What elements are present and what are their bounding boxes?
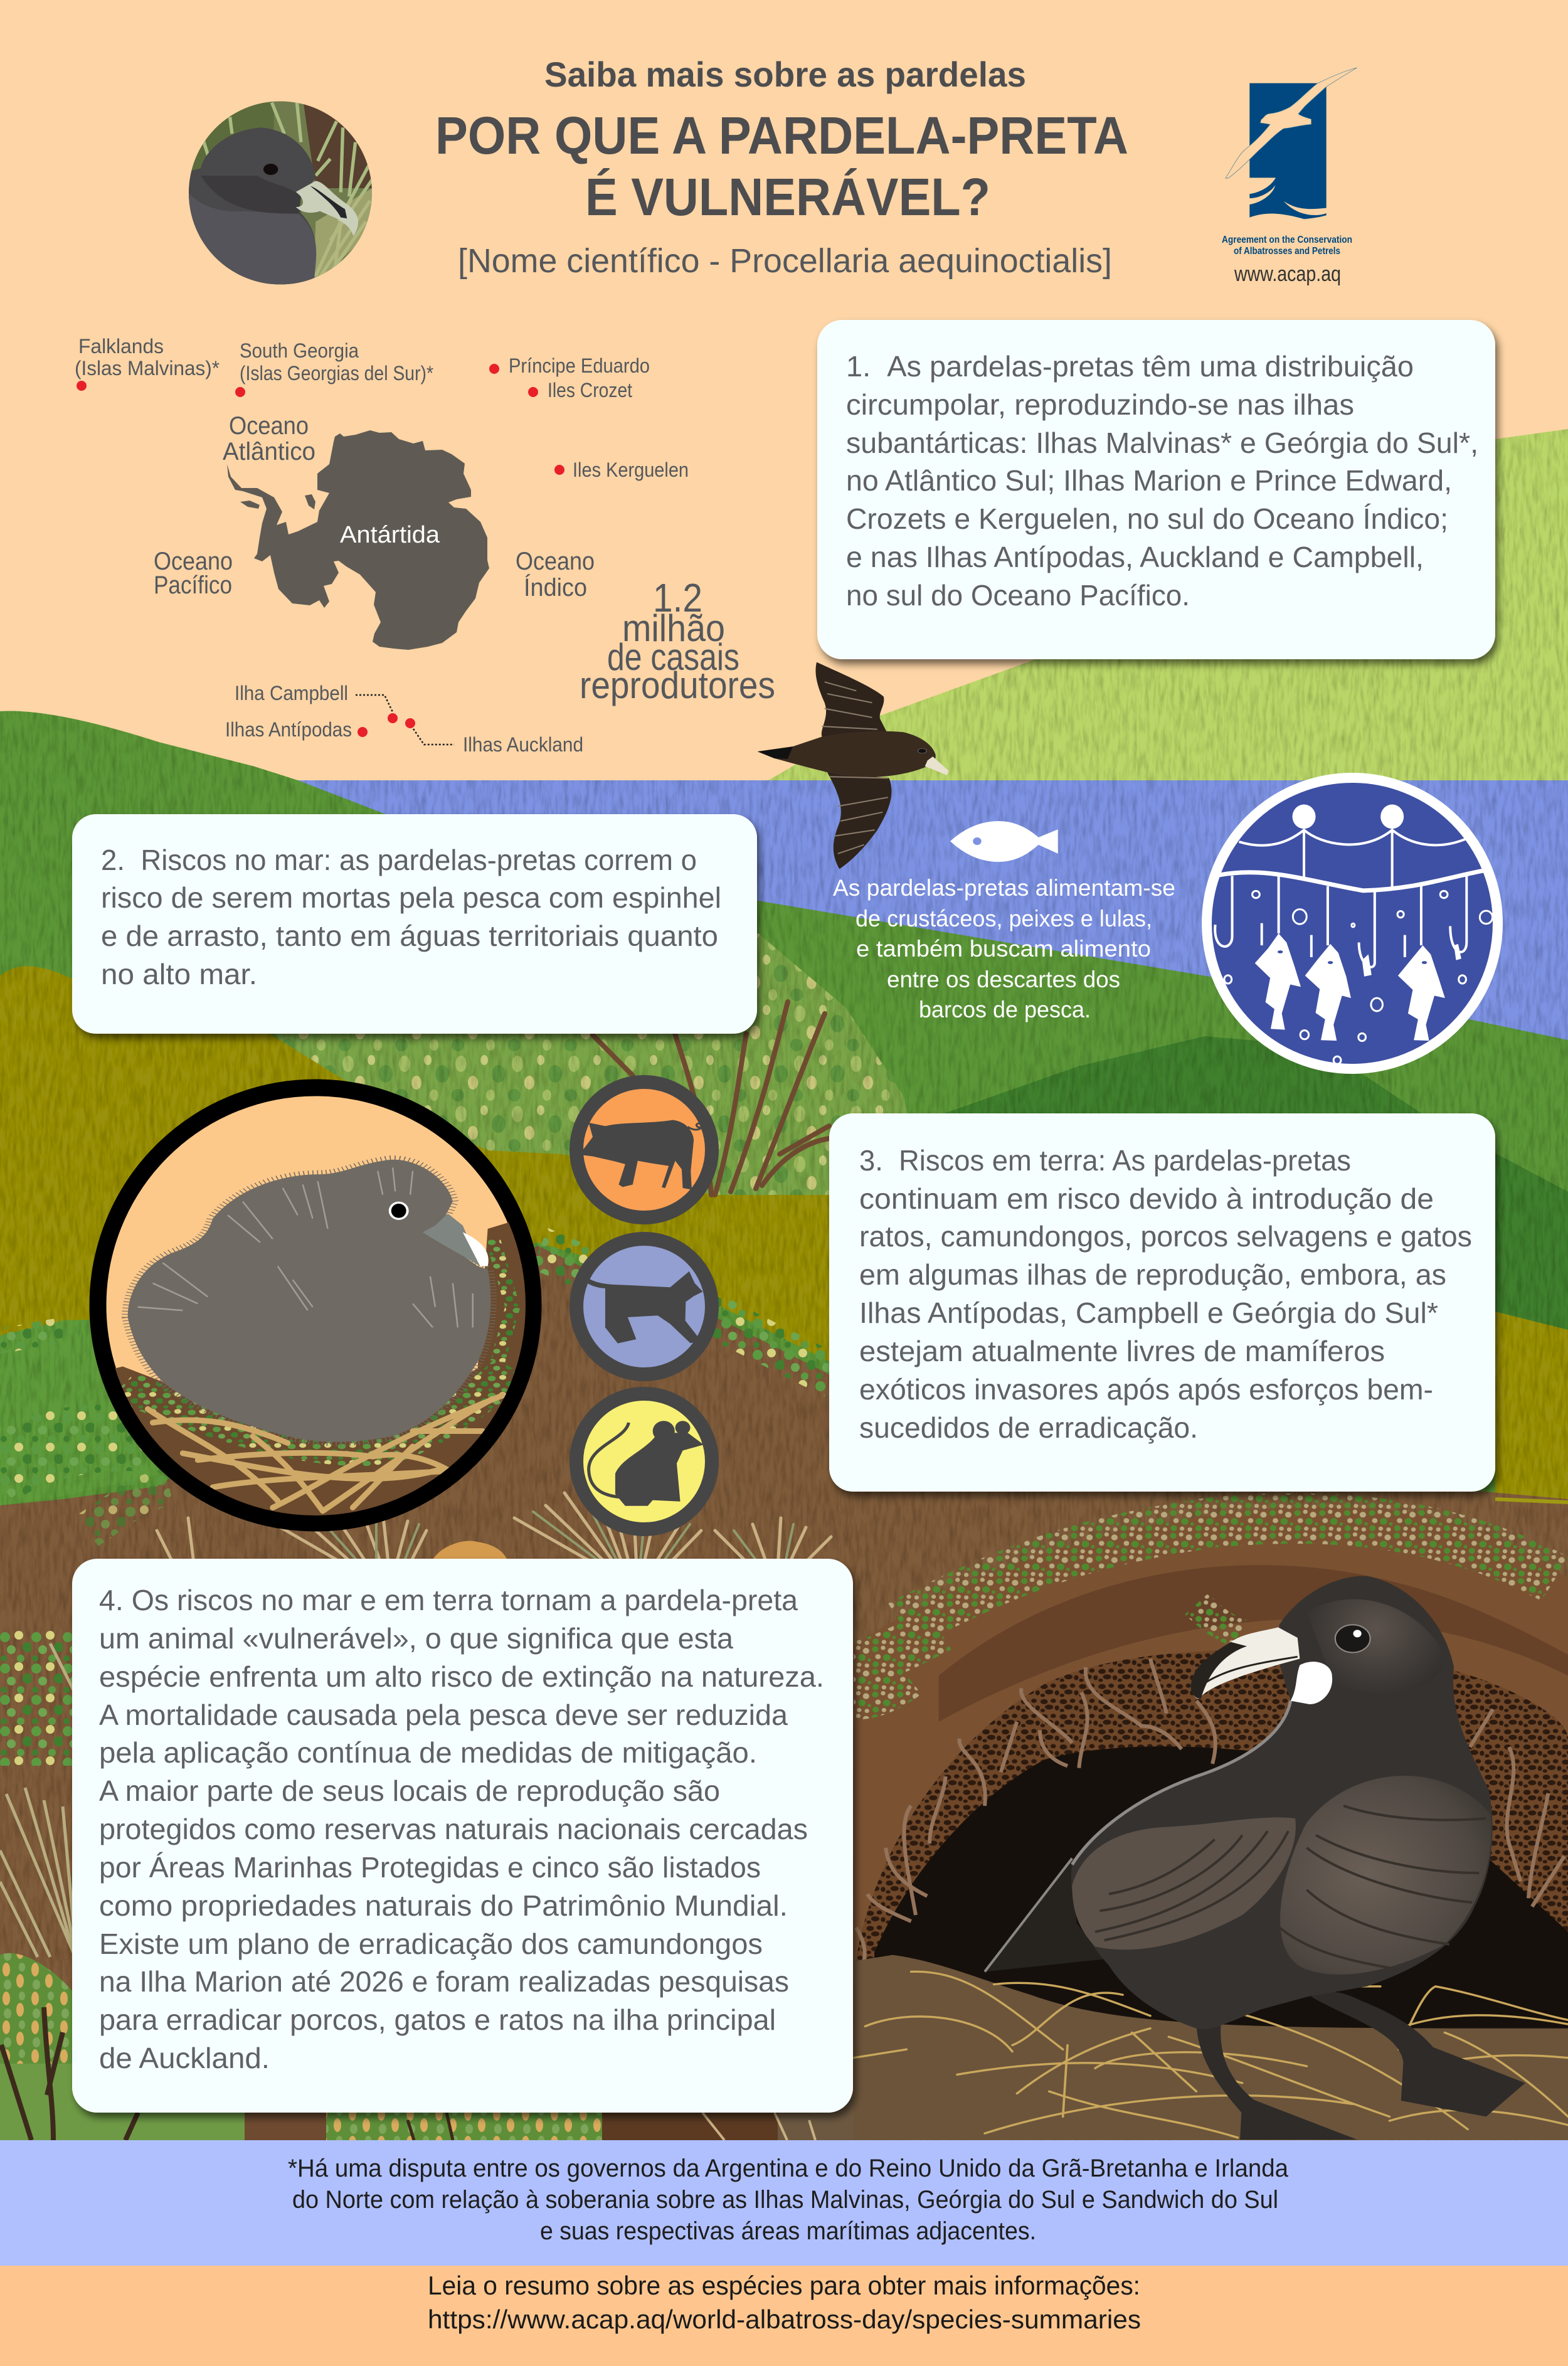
island labels: Iles Kerguelen (573, 459, 689, 481)
scientific name: [Nome científico - Procellaria aequinoctialis] (458, 242, 1112, 280)
header kicker: Saiba mais sobre as pardelas (544, 55, 1026, 94)
diet caption (833, 875, 1175, 1022)
ocean labels (154, 412, 595, 602)
chick eye (389, 1202, 409, 1220)
main title: POR QUE A PARDELA-PRETA (435, 106, 1128, 165)
panel 2 text: 2. Riscos no mar: as pardelas-pretas correm o (101, 844, 697, 876)
panel 2 text: no alto mar. (101, 958, 257, 990)
ropes and hooks (1215, 830, 1487, 967)
panel 4 text: um animal «vulnerável», o que significa que esta (99, 1622, 733, 1655)
island labels: South Georgia (240, 339, 359, 362)
panel 3 text: exóticos invasores após após esforços bem- (859, 1373, 1433, 1406)
diet caption: de crustáceos, peixes e lulas, (856, 906, 1152, 931)
portrait photo (188, 100, 373, 285)
population figure: 1.2 (653, 575, 702, 620)
burrow scene with bird (854, 1507, 1568, 2140)
further reading band (0, 2266, 1568, 2366)
continent shape (227, 430, 489, 650)
panel 1: distribution (817, 320, 1495, 659)
ocean labels: Índico (524, 573, 587, 602)
panel 4 text: pela aplicação contínua de medidas de mitigação. (99, 1736, 757, 1769)
island labels: (Islas Georgias del Sur)* (240, 362, 433, 385)
ground (854, 1955, 1568, 2140)
population figure: de casais (607, 636, 739, 678)
dotted leader lines (356, 695, 454, 745)
panel 1 text: Crozets e Kerguelen, no sul do Oceano Índico; (846, 502, 1448, 535)
icon: mouse (576, 1394, 712, 1529)
panel 4: vulnerable status (72, 1559, 853, 2113)
panel 3 text (859, 1144, 1472, 1444)
panel 4 text: por Áreas Marinhas Protegidas e cinco são listados (99, 1851, 761, 1884)
island labels: Ilhas Antípodas (225, 718, 352, 741)
logo caption (1222, 235, 1352, 257)
panel 3 text: em algumas ilhas de reprodução, embora, as (859, 1258, 1446, 1291)
bird beak (1191, 1627, 1300, 1699)
burrow mound (854, 1507, 1568, 2032)
diet caption: entre os descartes dos (887, 967, 1120, 992)
chick body (128, 1160, 490, 1442)
panel 1 text (846, 350, 1478, 612)
footnote band (0, 2140, 1568, 2266)
panel 4 text: na Ilha Marion até 2026 e foram realizadas pesquisas (99, 1965, 789, 1998)
flying petrel (758, 662, 949, 869)
panel 3 text: ratos, camundongos, porcos selvagens e gatos (859, 1220, 1472, 1253)
panel 4 text: como propriedades naturais do Patrimônio Mundial. (99, 1889, 788, 1922)
island labels: Ilhas Auckland (463, 733, 583, 756)
logo caption: of Albatrosses and Petrels (1234, 246, 1340, 257)
panel 1 text: circumpolar, reproduzindo-se nas ilhas (846, 388, 1354, 421)
panel 4 text: A maior parte de seus locais de reprodução são (99, 1774, 720, 1807)
island labels: Príncipe Eduardo (509, 354, 650, 377)
panel 4 text (99, 1584, 824, 2074)
main title: É VULNERÁVEL? (585, 167, 990, 226)
panel 4 text: protegidos como reservas naturais nacionais cercadas (99, 1813, 808, 1845)
panel 2: risks at sea (72, 814, 757, 1034)
fish icon (950, 821, 1058, 862)
diet caption: As pardelas-pretas alimentam-se (833, 875, 1175, 901)
further reading text: Leia o resumo sobre as espécies para obter mais informações: (428, 2271, 1140, 2300)
island labels: Falklands (78, 335, 164, 358)
bird wing (1072, 1817, 1296, 1950)
panel 1 text: no Atlântico Sul; Ilhas Marion e Prince Edward, (846, 464, 1452, 497)
island labels: Ilha Campbell (235, 682, 348, 704)
panel 4 text: espécie enfrenta um alto risco de extinção na natureza. (99, 1660, 824, 1693)
logo caption: Agreement on the Conservation (1222, 235, 1352, 245)
panel 4 text: Existe um plano de erradicação dos camundongos (99, 1928, 763, 1960)
population figure (580, 575, 775, 706)
footnote text: *Há uma disputa entre os governos da Argentina e do Reino Unido da Grã-Bretanha e Irlanda (288, 2155, 1289, 2182)
chick beak (423, 1214, 480, 1266)
panel 4 text: 4. Os riscos no mar e em terra tornam a pardela-preta (99, 1584, 798, 1616)
diet caption: e também buscam alimento (856, 936, 1151, 962)
panel 4 text: de Auckland. (99, 2042, 270, 2074)
panel 3 text: 3. Riscos em terra: As pardelas-pretas (859, 1144, 1351, 1177)
bird tail (985, 1859, 1104, 1971)
hooked fish (1255, 933, 1461, 1041)
panel 1 text: e nas Ilhas Antípodas, Auckland e Campbell, (846, 541, 1424, 573)
panel 3 text: sucedidos de erradicação. (859, 1411, 1198, 1444)
roots (856, 1659, 1564, 1982)
panel 3 text: Ilhas Antípodas, Campbell e Geórgia do Sul* (859, 1297, 1438, 1329)
main title (435, 106, 1128, 226)
population figure: milhão (622, 607, 725, 649)
header (435, 55, 1128, 280)
ACAP logo (1222, 68, 1357, 286)
panel 4 text: A mortalidade causada pela pesca deve ser reduzida (99, 1699, 788, 1731)
ocean labels: Atlântico (223, 438, 315, 465)
panel 4 text: para erradicar porcos, gatos e ratos na ilha principal (99, 2003, 776, 2036)
bird cheek patch (1291, 1662, 1332, 1704)
orange bush (432, 1541, 508, 1562)
ocean labels: Oceano (229, 412, 309, 440)
further reading text: https://www.acap.aq/world-albatross-day/species-summaries (428, 2305, 1141, 2334)
panel 2 text: risco de serem mortas pela pesca com espinhel (101, 881, 721, 914)
bird body (1071, 1576, 1493, 2029)
continent label: Antártida (340, 522, 440, 548)
panel 1 text: no sul do Oceano Pacífico. (846, 579, 1190, 612)
panel 3: risks on land (829, 1113, 1495, 1492)
map of Antarctica (75, 335, 775, 756)
population figure: reprodutores (580, 664, 775, 706)
bird legs and feet (1196, 1992, 1525, 2140)
nest mound (115, 1223, 526, 1515)
floats (1293, 805, 1404, 829)
island markers (77, 364, 564, 737)
logo website: www.acap.aq (1234, 262, 1341, 286)
burrow rim speckle (854, 1650, 1568, 2032)
grass tufts above panel 4 (157, 1487, 831, 1568)
diet caption: barcos de pesca. (919, 997, 1091, 1022)
bubbles (1224, 891, 1493, 1064)
panel 3 text: continuam em risco devido à introdução de (859, 1182, 1434, 1215)
panel 1 text: 1. As pardelas-pretas têm uma distribuição (846, 350, 1414, 383)
dry straw (854, 1971, 1568, 2138)
burrow hole (874, 1746, 1568, 2032)
brown branches (593, 1002, 829, 1195)
logo albatross (1226, 68, 1357, 178)
island labels (75, 335, 689, 756)
portrait beak (296, 181, 358, 236)
left bushes and grass (0, 1631, 878, 2140)
ocean labels: Oceano (516, 548, 595, 575)
ocean labels: Pacífico (154, 571, 232, 599)
ocean labels: Oceano (154, 548, 233, 575)
panel 1 text: subantárticas: Ilhas Malvinas* e Geórgia do Sul*, (846, 427, 1478, 459)
icon: cat (576, 1239, 712, 1374)
nest straw (148, 1396, 503, 1511)
island labels: Iles Crozet (548, 379, 632, 401)
panel 2 text: e de arrasto, tanto em águas territoriais quanto (101, 920, 718, 952)
longline fishing icon (1207, 778, 1498, 1069)
island labels: (Islas Malvinas)* (75, 357, 220, 379)
footnote text: do Norte com relação à soberania sobre as Ilhas Malvinas, Geórgia do Sul e Sandwich do Sul (292, 2186, 1278, 2214)
icon: pig (576, 1082, 712, 1217)
chick medallion (88, 1088, 538, 1531)
panel 2 text (101, 844, 721, 990)
further reading text (428, 2271, 1141, 2334)
footnote text: e suas respectivas áreas marítimas adjacentes. (540, 2217, 1036, 2245)
panel 3 text: estejam atualmente livres de mamíferos (859, 1335, 1385, 1367)
footnote text (288, 2155, 1289, 2245)
bird eye (1335, 1625, 1370, 1652)
chick down strokes (138, 1167, 473, 1327)
